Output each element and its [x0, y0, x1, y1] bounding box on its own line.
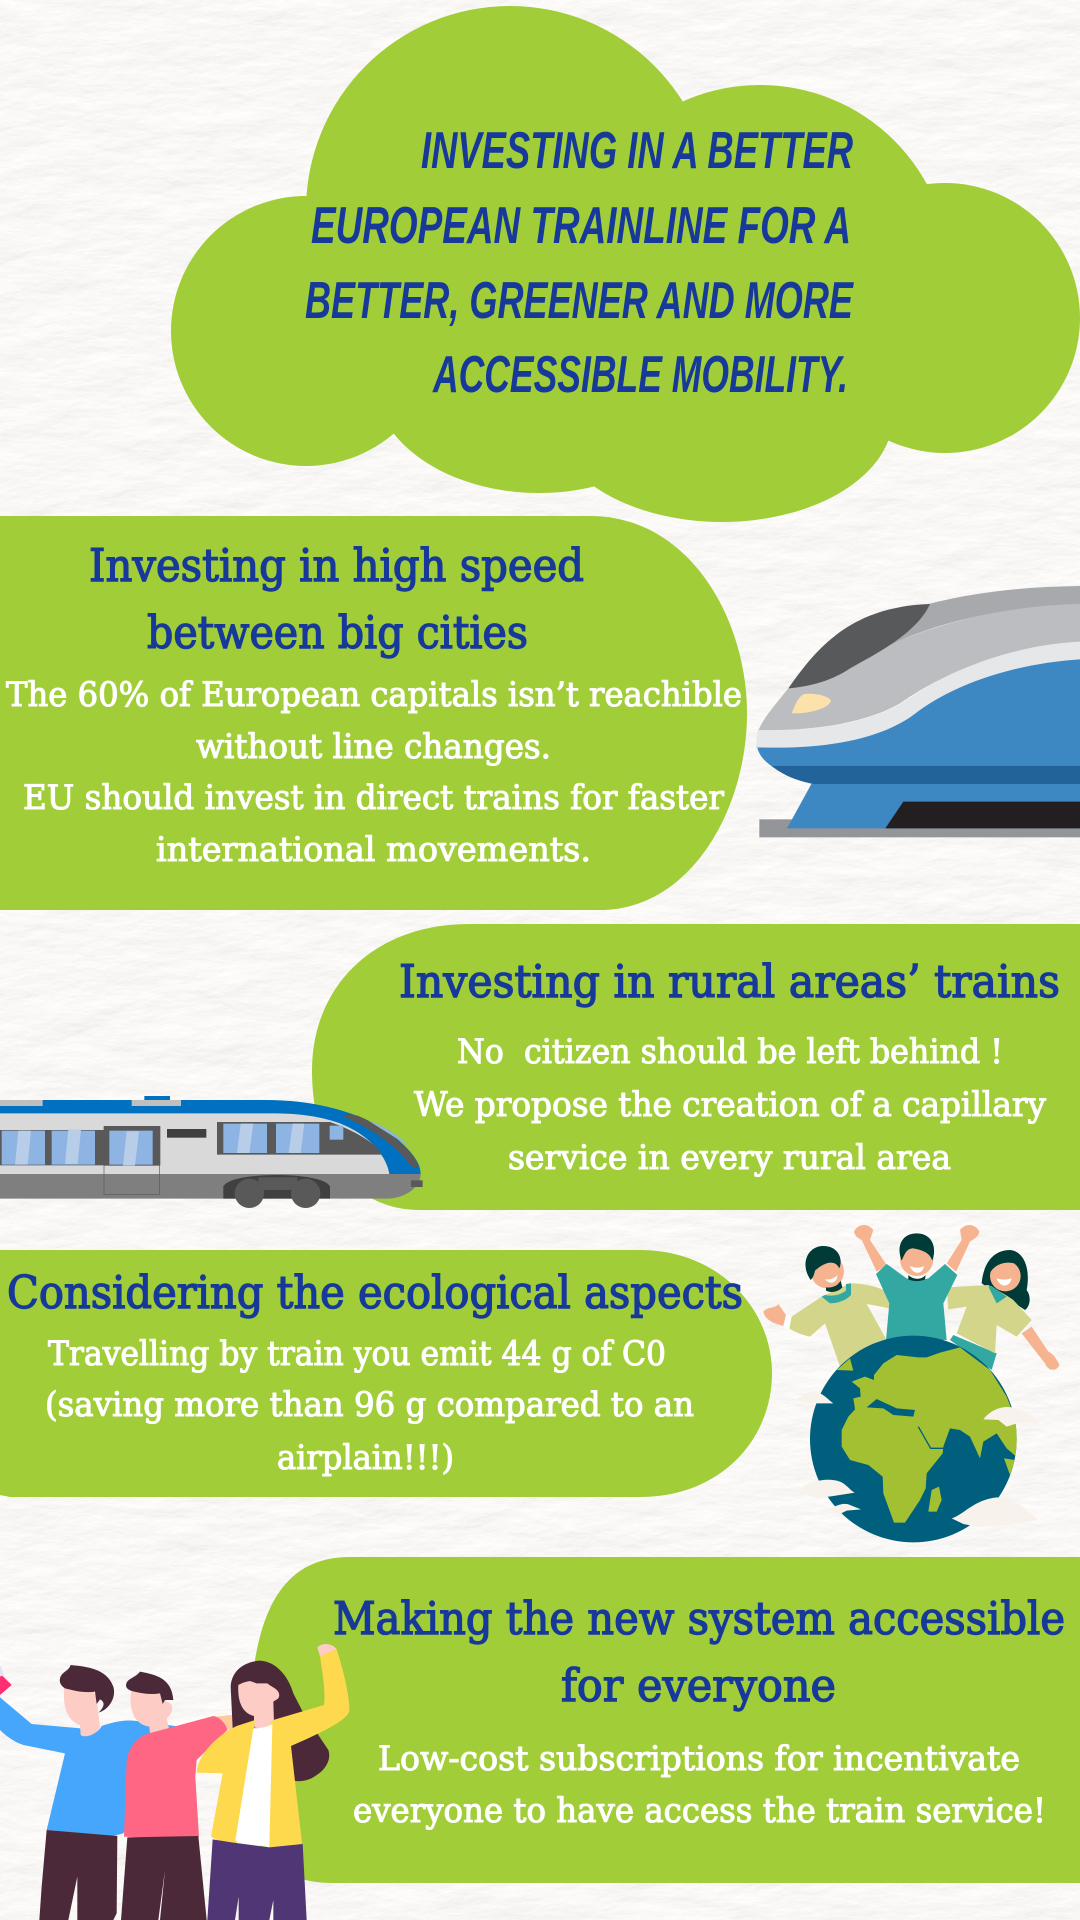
heading: high speed: between big cities	[147, 606, 528, 659]
person in pink	[121, 1672, 237, 1920]
heading: rural areas: Investing in rural areas’ trains	[399, 955, 1060, 1008]
panel shape	[0, 516, 747, 910]
cloud shape	[171, 6, 1080, 522]
icon: group of friends	[0, 1644, 349, 1920]
panel shape	[255, 1557, 1080, 1883]
body text: accessibility	[353, 1739, 1046, 1831]
right person	[947, 1250, 1059, 1370]
heading: accessibility	[333, 1592, 1065, 1712]
title text: ACCESSIBLE MOBILITY.	[432, 346, 848, 404]
panel: ecological	[0, 1250, 772, 1497]
body text: rural areas: service in every rural area	[508, 1138, 951, 1178]
body text: ecological	[45, 1334, 694, 1478]
title text: INVESTING IN A BETTER	[421, 122, 853, 180]
heading: high speed	[89, 539, 584, 659]
body text: high speed	[6, 675, 742, 870]
panel shape	[0, 1250, 772, 1497]
panel: rural areas	[312, 924, 1080, 1210]
person in yellow	[197, 1644, 349, 1920]
center person	[854, 1225, 979, 1340]
icon: high speed train	[756, 586, 1080, 837]
icon: people on globe	[763, 1225, 1059, 1542]
body text: high speed: without line changes.	[196, 727, 551, 767]
heading: accessibility: for everyone	[561, 1659, 836, 1712]
body text: rural areas: We propose the creation of a capillary	[414, 1085, 1047, 1125]
body text: ecological: (saving more than 96 g compared to an	[45, 1385, 694, 1425]
title text	[305, 122, 854, 404]
body text: high speed: The 60% of European capitals isn’t reachible	[6, 675, 742, 715]
body text: accessibility: everyone to have access the train service!	[353, 1791, 1046, 1831]
body text: high speed: EU should invest in direct trains for faster	[23, 778, 725, 818]
title text: EUROPEAN TRAINLINE FOR A	[311, 197, 851, 255]
body text: ecological: Travelling by train you emit 44 g of C0	[48, 1334, 666, 1374]
clouds	[795, 1391, 1040, 1527]
person in blue	[0, 1665, 180, 1920]
heading: ecological: Considering the ecological aspects	[7, 1266, 743, 1319]
body text: high speed: international movements.	[156, 830, 591, 870]
body text: rural areas	[414, 1032, 1047, 1178]
panel: high speed	[0, 516, 747, 910]
body text: rural areas: No citizen should be left behind !	[457, 1032, 1003, 1072]
icon: regional train	[0, 1096, 423, 1208]
panel shape	[312, 924, 1080, 1210]
left person	[763, 1246, 890, 1367]
body text: ecological: airplain!!!)	[277, 1438, 454, 1478]
title text: BETTER, GREENER AND MORE	[305, 272, 854, 330]
panel: title cloud	[171, 6, 1080, 522]
globe	[810, 1336, 1018, 1542]
body text: accessibility: Low-cost subscriptions for incentivate	[378, 1739, 1020, 1779]
panel: accessibility	[255, 1557, 1080, 1883]
heading: high speed: Investing in high speed	[89, 539, 584, 592]
